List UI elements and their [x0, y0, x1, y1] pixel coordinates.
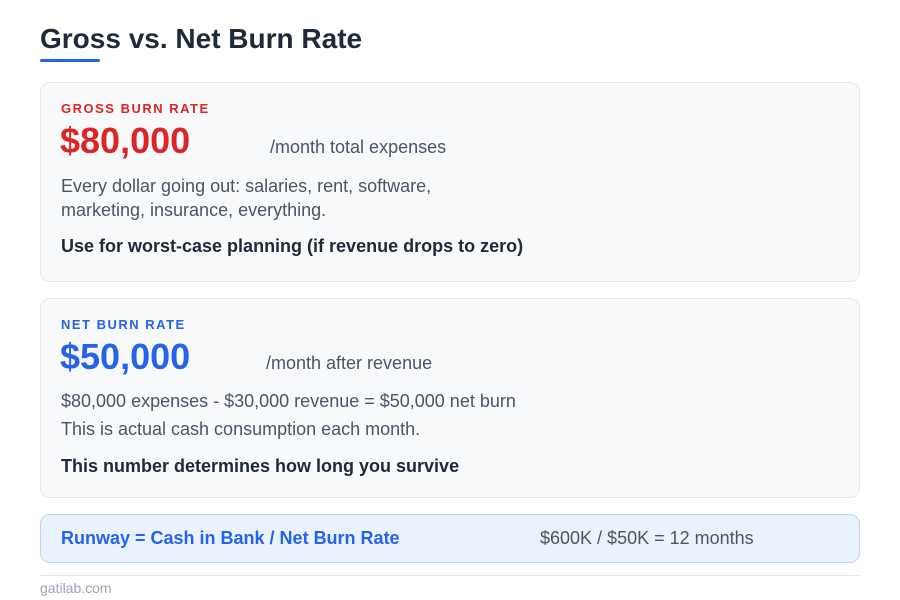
net description: This is actual cash consumption each month.: [61, 419, 420, 439]
panel: net burn: [40, 298, 860, 498]
net unit: /month after revenue: [266, 353, 432, 373]
net description: $80,000 expenses - $30,000 revenue = $50,000 net burn: [61, 391, 516, 411]
net description: [61, 391, 516, 439]
gross description: marketing, insurance, everything.: [61, 200, 326, 220]
gross unit: /month total expenses: [270, 137, 446, 157]
gross description: Every dollar going out: salaries, rent, software,: [61, 176, 431, 196]
runway formula bar: $600K / $50K = 12 months: [540, 528, 754, 548]
panel: gross burn: [40, 82, 860, 282]
runway formula bar: Runway = Cash in Bank / Net Burn Rate: [61, 528, 400, 548]
gross label: GROSS BURN RATE: [61, 101, 210, 116]
gross note: Use for worst-case planning (if revenue drops to zero): [61, 236, 523, 256]
runway formula bar: [40, 514, 860, 563]
net label: NET BURN RATE: [61, 317, 186, 332]
footer: gatilab.com: [40, 580, 112, 596]
net note: This number determines how long you survive: [61, 456, 459, 476]
title: Gross vs. Net Burn Rate: [40, 23, 362, 54]
gross value: $80,000: [60, 120, 190, 161]
net value: $50,000: [60, 336, 190, 377]
gross description: [61, 176, 431, 220]
